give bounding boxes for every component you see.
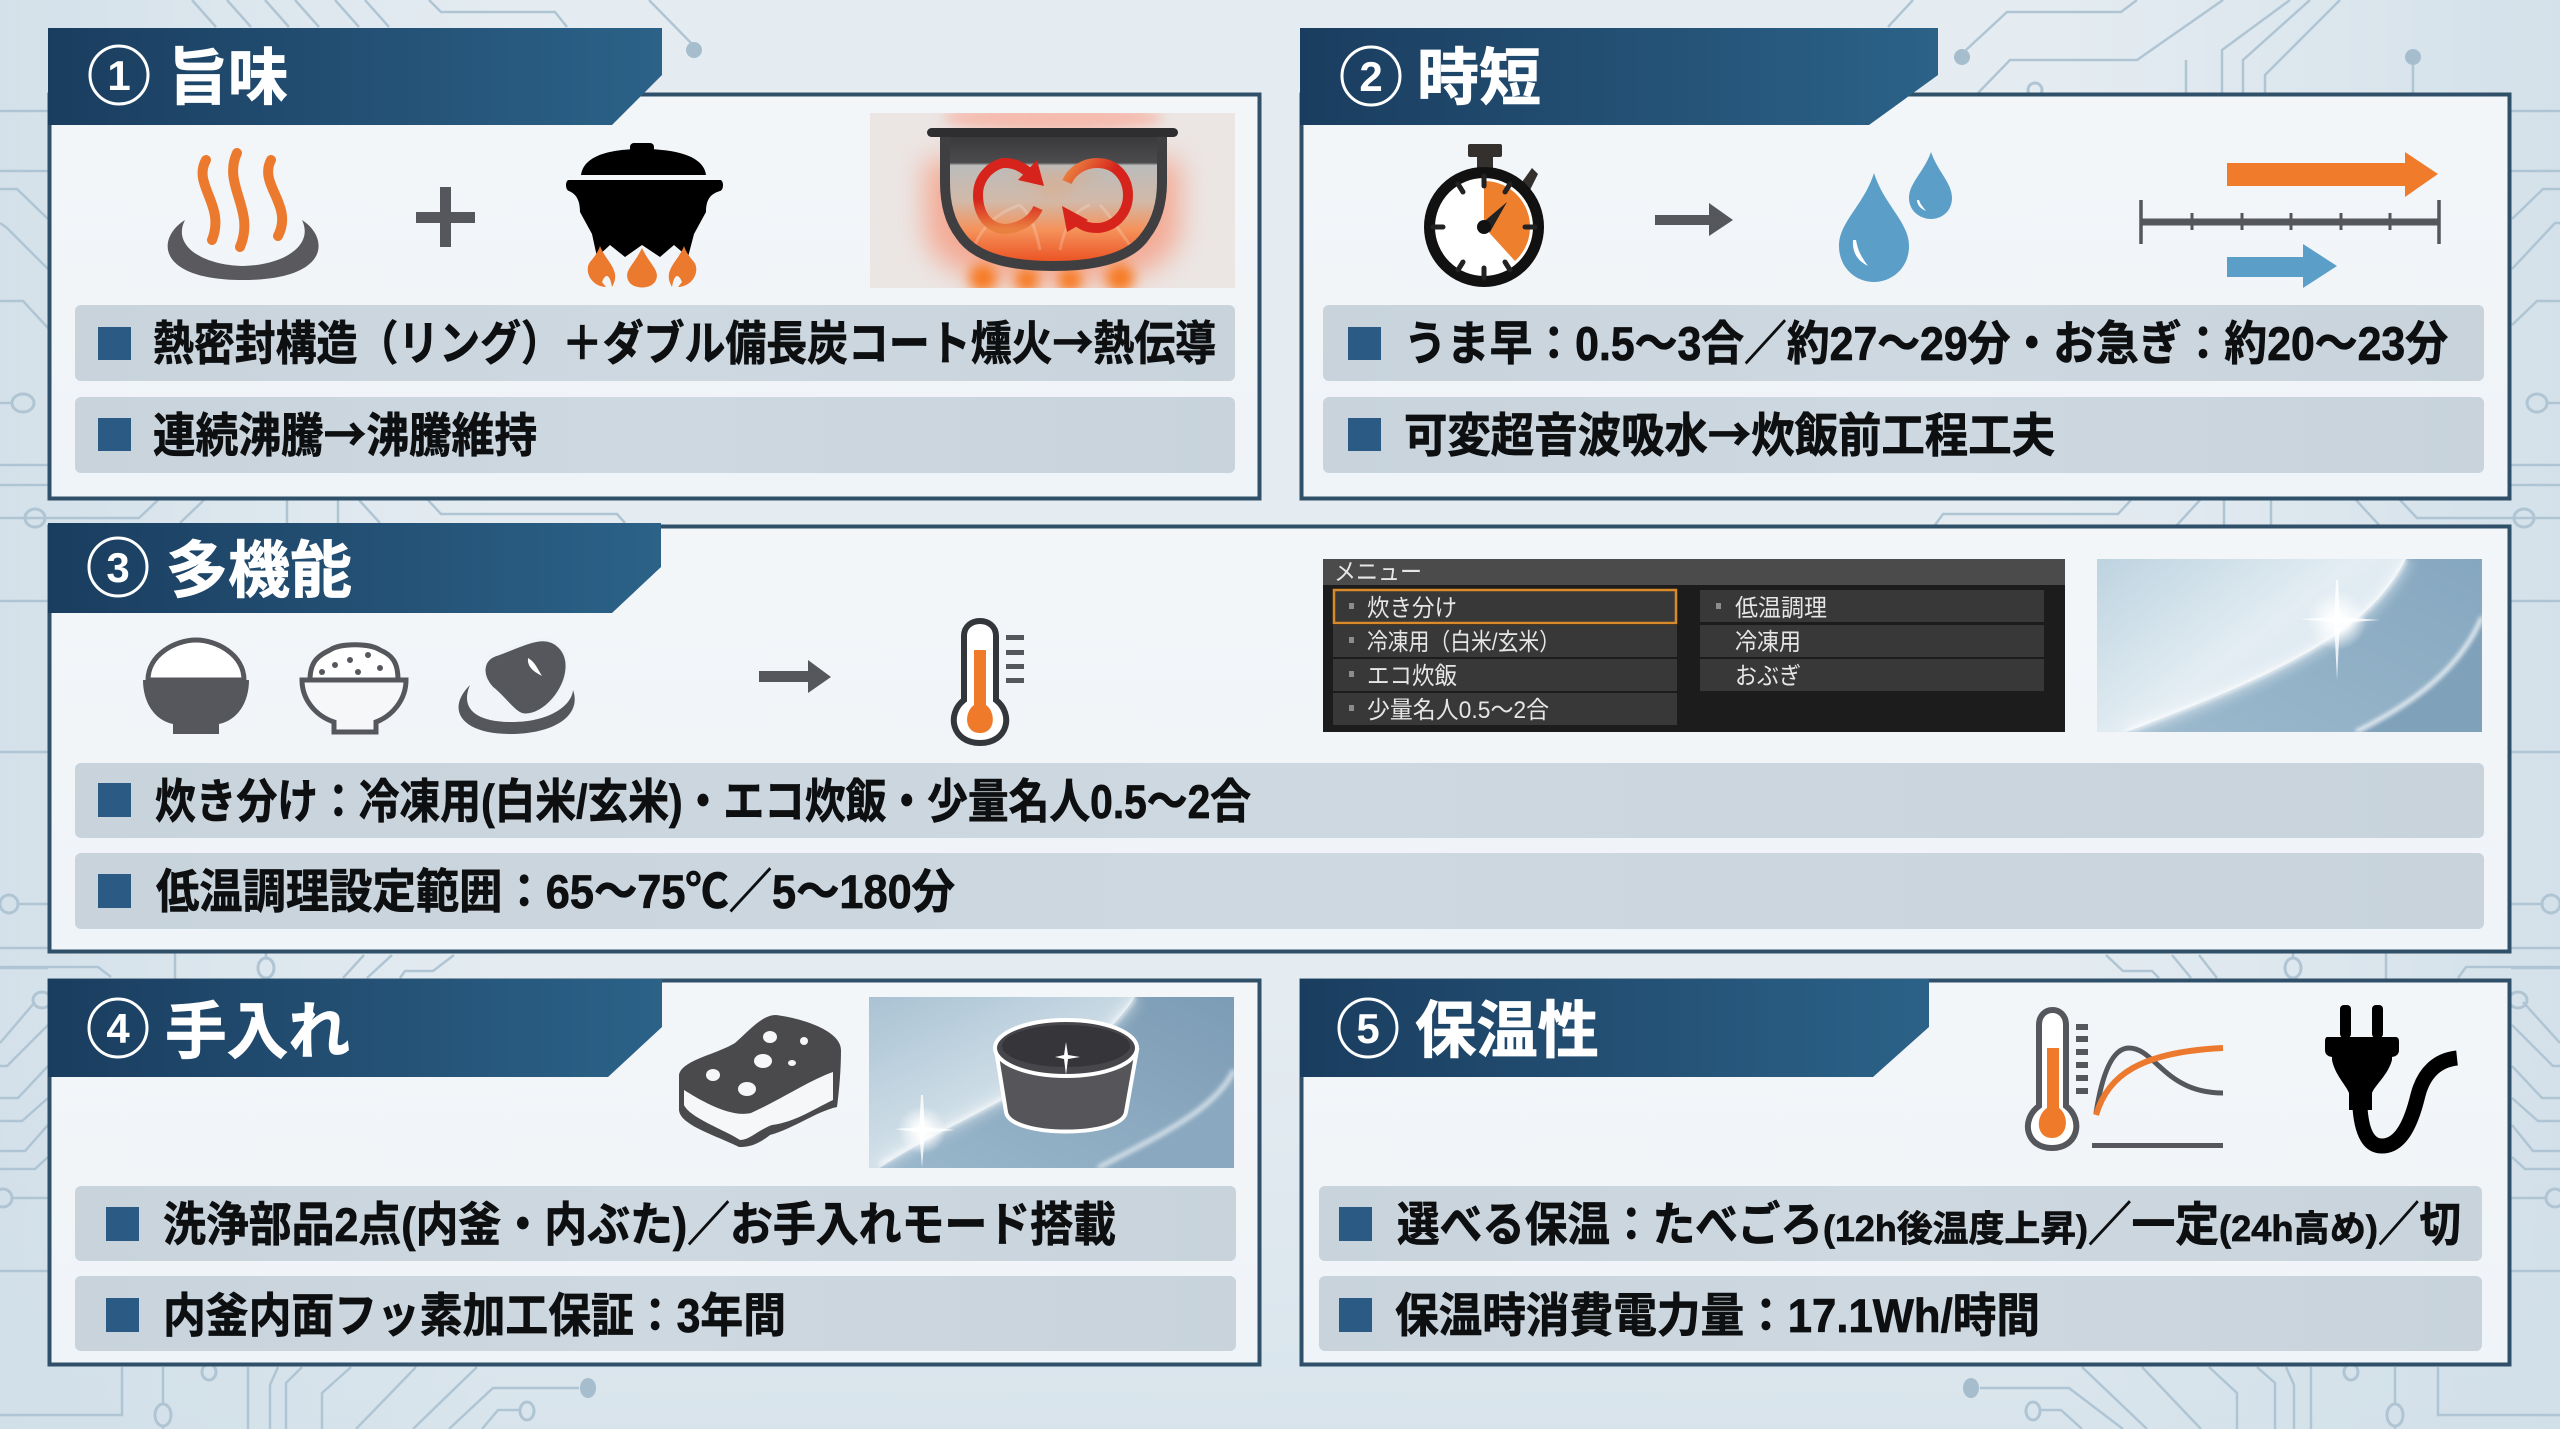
heading banner: ① 旨味	[48, 28, 662, 125]
feature row: 選べる保温: ／切	[2378, 1198, 2461, 1251]
menu screen: エコ炊飯	[1367, 663, 1457, 690]
icon: white rice bowl	[143, 640, 249, 734]
panel frame	[50, 980, 1260, 1364]
panel: ⑤ 保温性	[1300, 979, 2510, 1364]
feature row: 連続沸騰	[75, 397, 1235, 473]
feature row: 可変超音波吸水: 可変超音波吸水→炊飯前工程工夫	[1404, 397, 2055, 466]
feature row: 低温調理設定範囲	[75, 853, 2484, 929]
heading banner: ③ 多機能	[48, 523, 661, 613]
heading banner: ⑤ 保温性	[1300, 979, 1929, 1077]
heading banner: ③ 多機能: 3	[106, 544, 130, 591]
heading banner: ④ 手入れ: 4	[106, 1005, 130, 1052]
image: polished metal surface with sparkle	[2097, 559, 2482, 732]
feature row: フッ素加工保証	[75, 1276, 1236, 1351]
icon: black pot over flames	[566, 143, 723, 288]
feature row: フッ素加工保証: 内釜内面フッ素加工保証：3年間	[163, 1289, 786, 1342]
feature row: 選べる保温: ／一定	[2088, 1198, 2219, 1251]
heading banner: ② 時短: 2	[1359, 53, 1383, 100]
heading banner: ⑤ 保温性: 5	[1356, 1005, 1380, 1052]
heading banner: ① 旨味: 旨味	[168, 44, 288, 113]
icon: brown rice bowl	[302, 645, 406, 732]
heading banner: ④ 手入れ: 手入れ	[165, 998, 350, 1067]
feature row: 選べる保温: (12h後温度上昇)	[1823, 1208, 2088, 1249]
heading banner: ⑤ 保温性: 保温性	[1415, 997, 1599, 1066]
image: clean inner pot on polished metal	[869, 997, 1234, 1168]
icon: power plug with cord	[2325, 1005, 2457, 1146]
menu screen	[1323, 559, 2065, 732]
feature row: 炊き分け: 炊き分け：冷凍用(白米/玄米)・エコ炊飯・少量名人0.5～2合	[155, 775, 1251, 828]
heading banner: ③ 多機能: 多機能	[166, 537, 352, 606]
icon: plus sign	[416, 187, 475, 247]
arrow: to thermometer	[759, 660, 831, 693]
arrow: stopwatch to water	[1655, 203, 1733, 236]
menu screen: 炊き分け	[1367, 595, 1457, 622]
feature row: 連続沸騰: 連続沸騰→沸騰維持	[153, 397, 537, 466]
chart: soaking time comparison arrows on timeline	[2141, 152, 2439, 288]
feature row: うま早: うま早：0.5～3合／約27～29分・お急ぎ：約20～23分	[1404, 317, 2448, 370]
panel: ① 旨味	[48, 28, 1260, 498]
icon: thermometer	[954, 621, 1024, 743]
menu screen: 低温調理	[1735, 595, 1827, 622]
panel: ③ 多機能	[48, 523, 2510, 952]
panel frame	[50, 94, 1260, 498]
feature row: 可変超音波吸水	[1323, 397, 2484, 473]
menu screen: おぶぎ	[1735, 663, 1801, 690]
heading banner: ② 時短: 時短	[1417, 44, 1541, 113]
panel frame	[1302, 94, 2510, 498]
feature row: 洗浄部品: 洗浄部品2点(内釜・内ぶた)／お手入れモード搭載	[163, 1198, 1116, 1251]
panel: ② 時短	[1300, 28, 2510, 498]
heading banner: ① 旨味: 1	[107, 52, 131, 99]
menu screen: メニュー	[1334, 559, 1422, 586]
menu screen: 冷凍用	[1735, 629, 1801, 656]
menu screen: 冷凍用（白米/玄米）	[1367, 629, 1560, 656]
feature row: 選べる保温	[1319, 1186, 2482, 1261]
menu screen: 少量名人0.5～2合	[1367, 697, 1549, 724]
panel: ④ 手入れ	[48, 979, 1260, 1364]
heading banner: ④ 手入れ	[48, 979, 662, 1077]
image: inner pot convection with heat glow	[870, 104, 1235, 292]
feature row: 選べる保温: 選べる保温：たべごろ	[1397, 1198, 1823, 1251]
icon: sponge	[679, 1015, 841, 1147]
icon: meat on plate	[459, 640, 575, 734]
panel frame	[1302, 980, 2510, 1364]
feature row: 選べる保温: (24h高め)	[2219, 1208, 2378, 1249]
feature row: うま早	[1323, 305, 2484, 381]
feature row: 保温時消費電力量: 保温時消費電力量：17.1Wh/時間	[1395, 1289, 2040, 1342]
feature row: 低温調理設定範囲: 低温調理設定範囲：65～75℃／5～180分	[156, 865, 955, 918]
heading banner: ② 時短	[1300, 28, 1938, 125]
icon: steam over heat-seal ring	[168, 153, 319, 280]
icon: water drops	[1839, 152, 1952, 282]
feature row: 熱密封構造: 熱密封構造（リング）＋ダブル備長炭コート燻火→熱伝導	[153, 305, 1216, 374]
feature row: 炊き分け	[75, 763, 2484, 838]
panel frame	[50, 526, 2510, 952]
icon: stopwatch	[1430, 144, 1538, 282]
feature row: 保温時消費電力量	[1319, 1276, 2482, 1351]
feature row: 洗浄部品	[75, 1186, 1236, 1261]
icon: thermometer with keep-warm curves	[2028, 1010, 2223, 1148]
